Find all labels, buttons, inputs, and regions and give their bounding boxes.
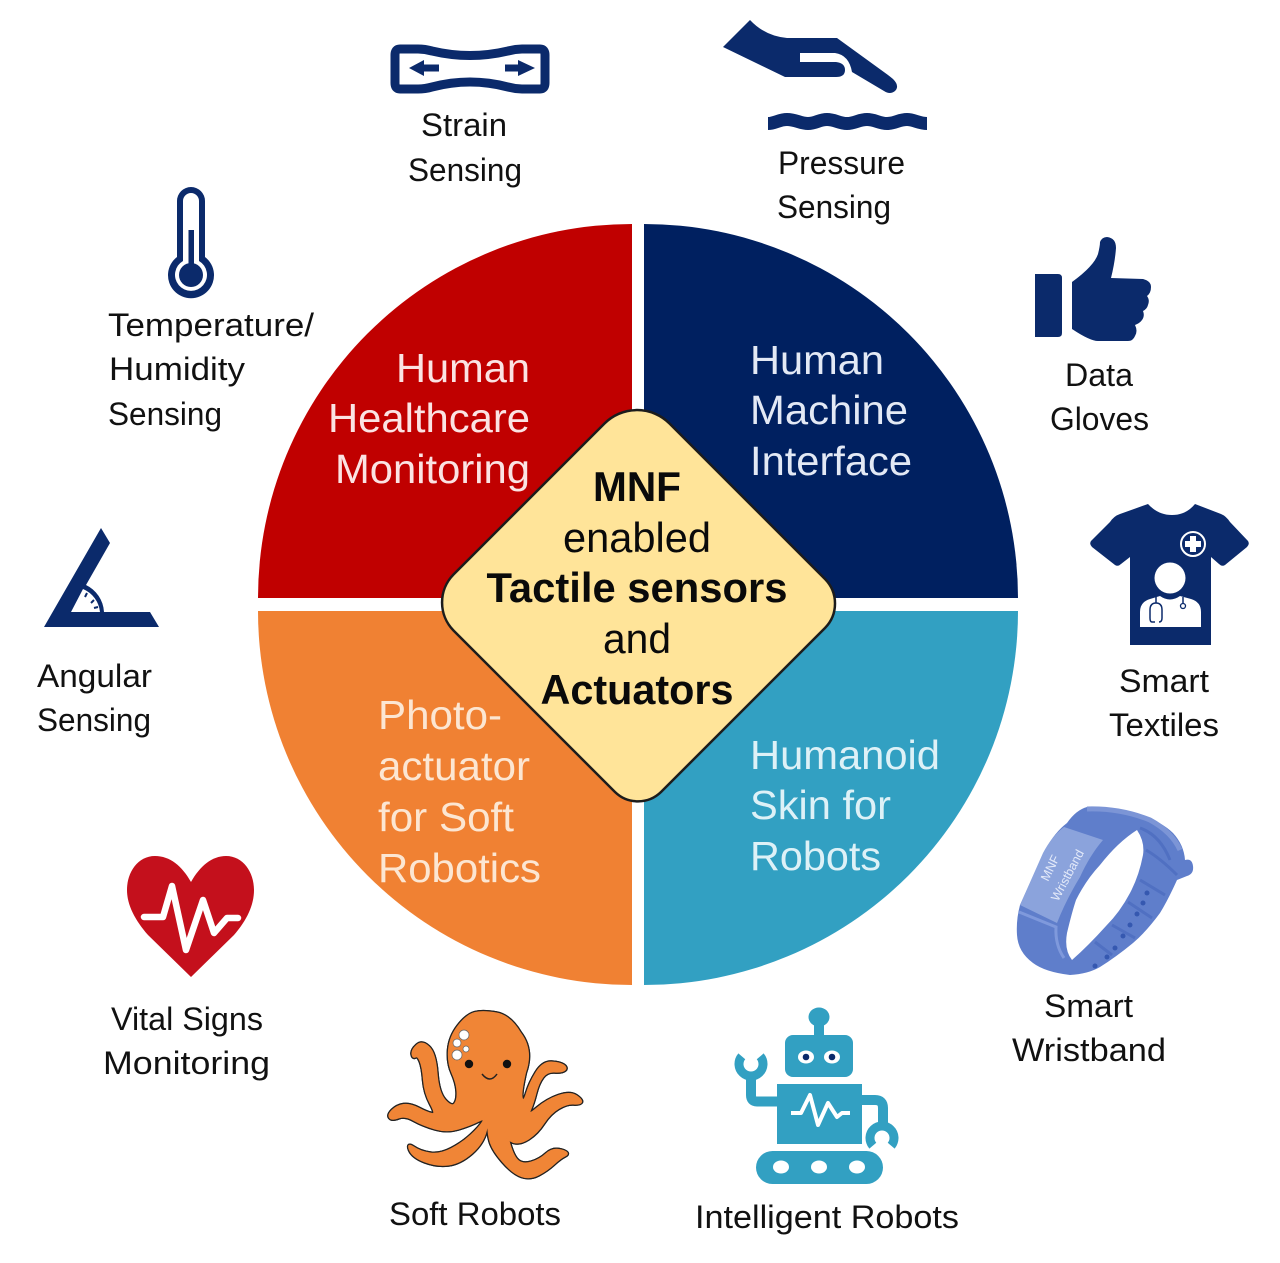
panel: humanoid skin for robots: Robots	[750, 833, 881, 879]
label: temperature humidity sensing: Sensing	[108, 396, 222, 432]
label: data gloves: Gloves	[1050, 401, 1149, 437]
icon: smart textile t-shirt	[1090, 504, 1249, 645]
label: strain sensing: Strain	[421, 107, 507, 143]
panel: human healthcare monitoring: Monitoring	[335, 446, 530, 492]
label: vital signs monitoring: Monitoring	[103, 1045, 270, 1081]
icon: octopus soft robot	[389, 1012, 581, 1177]
panel: human healthcare monitoring: Healthcare	[328, 395, 530, 441]
icon: MNF wristband: MNF	[1038, 853, 1063, 883]
panel: photo-actuator for soft robotics	[258, 611, 632, 985]
label: angular sensing: Angular	[37, 658, 152, 694]
center diamond: MNF enabled tactile sensors and actuators: Actuators	[540, 666, 734, 713]
icon: thermometer	[168, 187, 214, 298]
icon: thumbs up glove	[1035, 237, 1151, 341]
label: data gloves	[1050, 357, 1149, 437]
label: intelligent robots: Intelligent Robots	[695, 1199, 959, 1235]
label: pressure sensing: Pressure	[778, 145, 905, 181]
label: pressure sensing: Sensing	[777, 189, 891, 225]
center diamond: MNF enabled tactile sensors and actuators: MNF	[593, 463, 681, 510]
center diamond: MNF enabled tactile sensors and actuators: and	[603, 615, 671, 662]
label: smart wristband	[1012, 988, 1166, 1068]
icon: intelligent robot	[739, 1008, 894, 1184]
center diamond: MNF enabled tactile sensors and actuators: enabled	[563, 514, 711, 561]
panel: human machine interface: Machine	[750, 387, 908, 433]
label: smart textiles: Smart	[1119, 663, 1209, 699]
panel: human machine interface: Interface	[750, 438, 912, 484]
label: temperature humidity sensing	[108, 307, 314, 432]
panel: human healthcare monitoring	[258, 224, 632, 598]
panel: human machine interface	[644, 224, 1018, 598]
icon: angular protractor	[44, 528, 159, 627]
panel: humanoid skin for robots	[644, 611, 1018, 985]
label: data gloves: Data	[1065, 357, 1133, 393]
label: angular sensing: Sensing	[37, 702, 151, 738]
icon: pressure hand	[723, 20, 927, 124]
panel: photo-actuator for soft robotics: for Soft	[378, 794, 515, 840]
panel: photo-actuator for soft robotics: Robotics	[378, 845, 541, 891]
panel: human healthcare monitoring: Human	[396, 345, 530, 391]
label: temperature humidity sensing: Temperature/	[108, 307, 314, 343]
label: smart textiles: Textiles	[1109, 707, 1219, 743]
label: strain sensing: Sensing	[408, 152, 522, 188]
panel: human machine interface: Human	[750, 337, 884, 383]
label: vital signs monitoring: Vital Signs	[111, 1001, 263, 1037]
panel: humanoid skin for robots: Skin for	[750, 782, 891, 828]
label: temperature humidity sensing: Humidity	[109, 351, 245, 387]
icon: MNF wristband: Wristband	[1048, 847, 1087, 903]
label: smart wristband: Smart	[1044, 988, 1133, 1024]
center diamond: MNF enabled tactile sensors and actuators	[442, 410, 835, 801]
panel: photo-actuator for soft robotics: actuator	[378, 743, 530, 789]
icon: MNF wristband	[1017, 807, 1193, 975]
label: smart wristband: Wristband	[1012, 1032, 1166, 1068]
label: pressure sensing	[777, 145, 905, 225]
label: soft robots: Soft Robots	[389, 1196, 561, 1232]
label: smart textiles	[1109, 663, 1219, 743]
panel: humanoid skin for robots: Humanoid	[750, 732, 940, 778]
icon: strain	[395, 49, 545, 89]
icon: heart with pulse	[127, 856, 254, 977]
label: vital signs monitoring	[103, 1001, 270, 1081]
label: angular sensing	[37, 658, 152, 738]
panel: photo-actuator for soft robotics: Photo-	[378, 692, 502, 738]
center diamond: MNF enabled tactile sensors and actuators: Tactile sensors	[486, 564, 788, 611]
label: strain sensing	[408, 107, 522, 188]
